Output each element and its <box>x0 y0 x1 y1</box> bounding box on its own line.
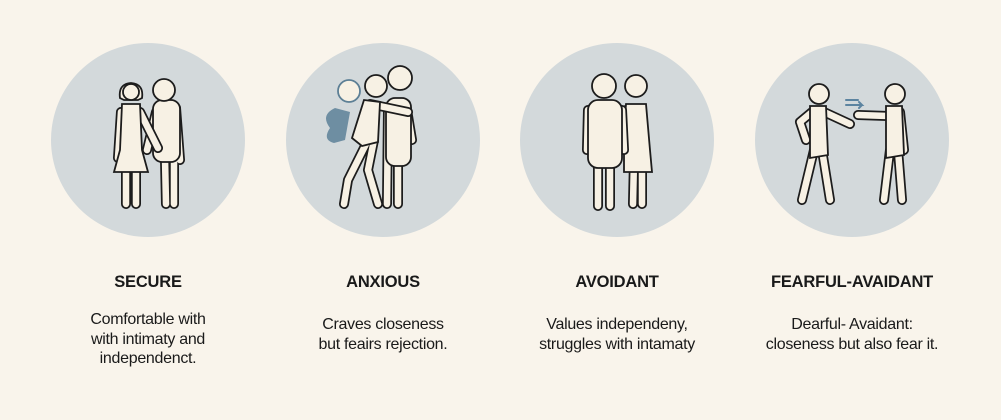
text: avoidant description <box>539 316 696 352</box>
text: avoidant description: Values independeny, <box>546 316 688 333</box>
text: secure description: Comfortable with <box>90 311 206 328</box>
text: secure description: independenct. <box>100 350 196 367</box>
arrow <box>846 100 862 108</box>
title: avoidant: AVOIDANT <box>575 273 659 291</box>
icon: avoidant pair <box>587 74 652 206</box>
text: avoidant description: struggles with intamaty <box>539 336 695 352</box>
circle: anxious <box>286 43 480 237</box>
circle: avoidant <box>520 43 714 237</box>
circle: fearful-avoidant <box>755 43 949 237</box>
icon: fearful-avoidant figures reaching <box>800 84 905 200</box>
circle: secure <box>51 43 245 237</box>
text: anxious description: but feairs rejection. <box>319 336 447 352</box>
text: fearful-avoidant description <box>766 316 938 352</box>
text: fearful-avoidant description: closeness but also fear it. <box>766 336 938 352</box>
icon: anxious clinging figures <box>326 66 412 204</box>
title: fearful-avoidant: FEARFUL-AVAIDANT <box>771 273 933 291</box>
icon: secure couple <box>114 79 180 204</box>
text: anxious description <box>319 316 447 352</box>
title: secure: SECURE <box>114 273 182 291</box>
text: anxious description: Craves closeness <box>322 316 444 333</box>
text: secure description: with intimaty and <box>91 330 205 348</box>
title: anxious: ANXIOUS <box>346 273 420 291</box>
text: fearful-avoidant description: Dearful- Avaidant: <box>791 316 913 333</box>
text: secure description <box>90 311 206 367</box>
